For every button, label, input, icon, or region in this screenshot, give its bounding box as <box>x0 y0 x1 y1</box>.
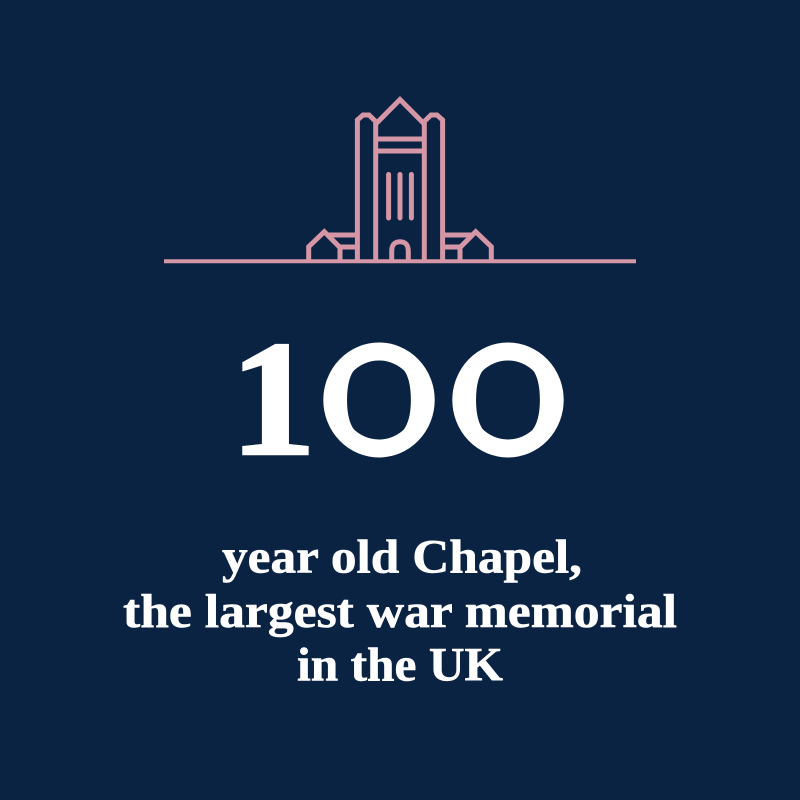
caption text <box>123 530 677 692</box>
caption text: year old Chapel, <box>222 530 582 584</box>
big number 100: 1 <box>230 307 316 490</box>
icon: chapel tower on ground line <box>164 100 636 261</box>
big number 100: 0 <box>320 321 438 480</box>
big number 100: 0 <box>449 321 567 480</box>
caption text: in the UK <box>297 638 503 692</box>
big number 100 <box>230 307 567 490</box>
caption text: the largest war memorial <box>123 585 677 638</box>
